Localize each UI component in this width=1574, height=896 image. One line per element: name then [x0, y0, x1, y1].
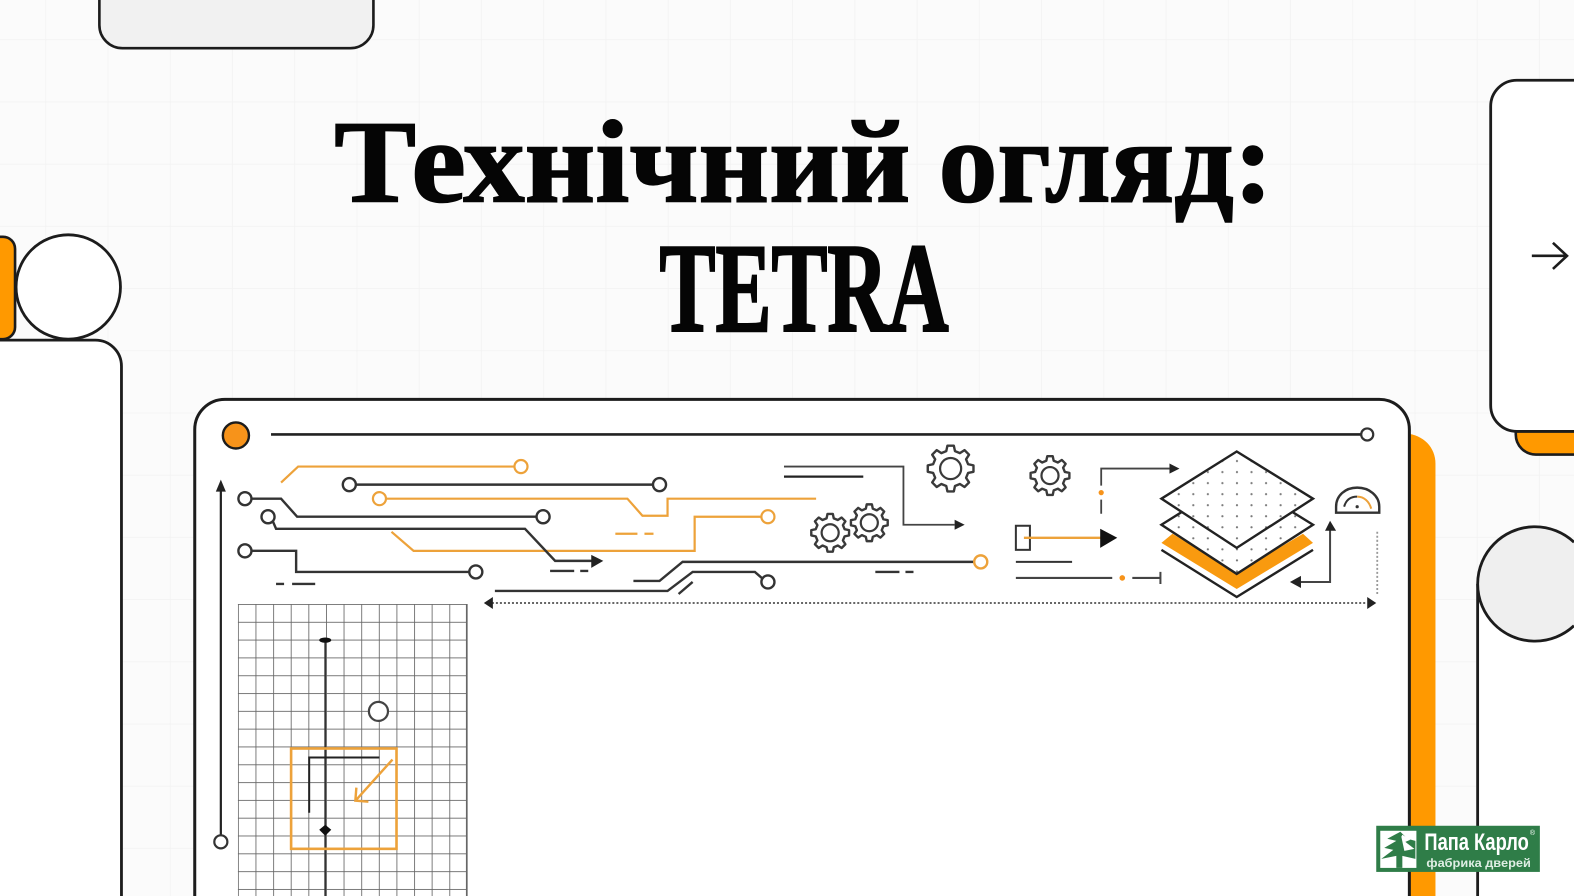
logo name: Папа Карло [1424, 829, 1529, 856]
orange circuit traces [281, 460, 816, 551]
left orange pill [0, 237, 15, 339]
logo: Папа Карло [1376, 826, 1540, 872]
panel: main blueprint [195, 399, 1409, 896]
icon: gear right [1031, 456, 1069, 495]
logo tree icon [1380, 831, 1416, 868]
component with orange arrow [1016, 526, 1117, 550]
orange frame [291, 749, 397, 849]
left white card [0, 340, 121, 896]
left white circle [16, 235, 120, 339]
title line 1: Технічний [334, 98, 910, 228]
top-left card [99, 0, 373, 48]
icon: stacked layers [1161, 452, 1313, 597]
icon: right arrow [1532, 243, 1567, 269]
middle layer [1161, 478, 1313, 574]
grid plan [238, 604, 467, 896]
logo registered mark: ® [1530, 829, 1536, 837]
lower-right grey circle: clipped at the right edge [1478, 527, 1574, 641]
dotted vertical line [1376, 532, 1378, 594]
dark corner bracket [309, 758, 379, 813]
orange strip behind main panel [1405, 433, 1435, 896]
top layer [1161, 452, 1313, 548]
title line 2: TETRA [660, 217, 949, 359]
arrow into layers [1099, 464, 1179, 514]
logo tagline: фабрика дверей [1426, 858, 1531, 870]
orange layer [1161, 534, 1313, 589]
orange arrow [355, 760, 392, 802]
dotted dimension arrow [484, 597, 1376, 609]
measure lines [1016, 562, 1160, 584]
plan vertical axis [319, 638, 331, 896]
icon: gear large [928, 446, 973, 491]
dark circuit traces [238, 478, 987, 594]
title line 1 [334, 98, 1273, 228]
orange status dot [223, 422, 249, 449]
right orange tab [1516, 426, 1574, 455]
bottom chevron [1161, 550, 1313, 597]
connector arrow from gears [784, 467, 965, 530]
lower-right card [1478, 584, 1574, 896]
title line 1: огляд: [939, 98, 1273, 228]
icon: gauge [1336, 488, 1379, 513]
plan circle [369, 702, 388, 721]
return arrow [1290, 521, 1336, 588]
title [334, 98, 1273, 359]
right white card [1491, 80, 1574, 431]
top rule with end node [271, 428, 1373, 440]
icon: gear pair [811, 504, 888, 552]
vertical axis arrow [214, 480, 227, 848]
